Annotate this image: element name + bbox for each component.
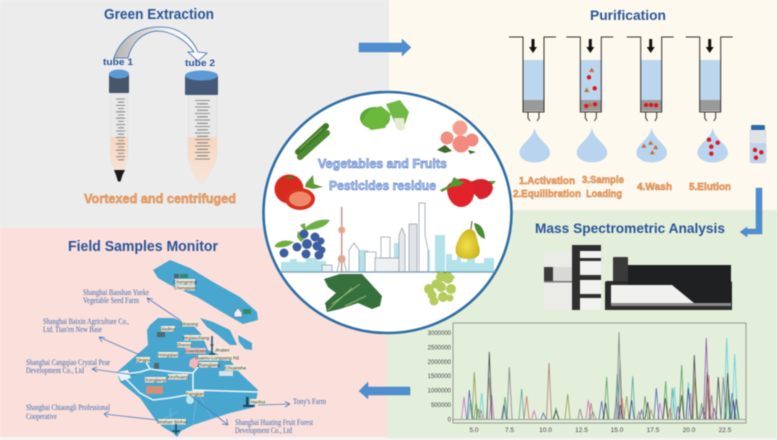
- y axis labels: 1500000: [428, 374, 452, 380]
- icon: pellet: [114, 170, 125, 182]
- farm callout labels: Ltd. Tian'en New Base: [43, 325, 102, 334]
- x axis labels: 7.5: [505, 427, 514, 434]
- map landmark icons: [146, 274, 254, 434]
- icon: LC-MS instrument: [544, 245, 732, 310]
- step labels: 1.Activation: [519, 176, 575, 187]
- step labels: 3.Sample: [582, 175, 624, 186]
- illustration: strawberries: [440, 177, 496, 207]
- central circle: [264, 92, 512, 333]
- illustration: Shanghai skyline: [280, 203, 495, 272]
- panel: green extraction: [0, 0, 389, 228]
- step labels: [513, 175, 731, 200]
- farm callout labels: Shanghai Baoshan Yueke: [83, 288, 149, 297]
- label: tube 1: tube 1: [103, 57, 134, 68]
- y axis labels: 3000000: [428, 331, 452, 337]
- x axis labels: 20.0: [683, 427, 696, 434]
- y axis labels: 0: [448, 418, 452, 424]
- y axis labels: 2000000: [428, 360, 452, 366]
- chromatogram peaks: [462, 332, 739, 419]
- farm callout labels: [26, 288, 327, 435]
- map place names: Zhangjiang: [197, 362, 220, 368]
- circle title: Pesticides residue: [329, 178, 436, 193]
- step labels: 5.Elution: [689, 182, 731, 193]
- illustration: kale: [324, 274, 382, 312]
- panel: mass spectrometric analysis: [387, 210, 777, 438]
- column: activation: [509, 37, 556, 162]
- map place names: Qingpu: [136, 358, 151, 362]
- y axis labels: 500000: [431, 403, 452, 409]
- step labels: Loading: [586, 189, 622, 200]
- map place names: Chengqiao: [174, 286, 197, 290]
- circle title: Vegetables and Fruits: [318, 156, 447, 171]
- map callout arrows: [92, 298, 290, 425]
- column: sample loading: [566, 37, 613, 162]
- map place names: Wusong: [181, 322, 198, 326]
- illustration: blueberries: [275, 220, 330, 260]
- farm callout labels: Shanghai Baixin Agriculture Co.,: [43, 317, 129, 326]
- panel: field samples monitor: [0, 228, 387, 437]
- y axis labels: [428, 331, 452, 424]
- map: Shanghai: [117, 260, 266, 437]
- illustration: peaches: [437, 120, 478, 154]
- x axis labels: 22.5: [719, 427, 732, 434]
- map place names: Zhenru: [177, 342, 192, 348]
- farm callout labels: Shanghai Chiaongli Professional: [26, 403, 111, 412]
- map place names: [136, 280, 265, 424]
- farm callout labels: Shanghai Cangqiao Crystal Pear: [26, 358, 110, 367]
- arrow: extraction to purification: [359, 39, 411, 56]
- arrow: purification to mass spectrometry: [740, 188, 762, 237]
- map place names: Huamu-Longyang Rd: [195, 356, 239, 360]
- map place names: Xinzhuang: [167, 374, 189, 380]
- heading: Purification: Purification: [590, 7, 666, 23]
- map place names: Jinqiao: [215, 348, 230, 352]
- icon: tube 1: [109, 70, 129, 182]
- heading: Mass Spectrometric Analysis: Mass Spectrometric Analysis: [535, 220, 725, 236]
- icon: vial: [750, 125, 766, 163]
- illustration: tomatoes: [274, 174, 323, 210]
- caption: vortexed and centrifuged: Vortexed and centrifuged: [84, 191, 236, 206]
- icon: Oriental Pearl Tower: [337, 207, 346, 272]
- heading: Field Samples Monitor: Field Samples Monitor: [68, 238, 218, 255]
- x axis labels: 10.0: [539, 427, 552, 434]
- illustration: grapes: [424, 272, 456, 306]
- map place names: Nanhui: [251, 400, 265, 404]
- step labels: 2.Equilibration: [513, 189, 581, 200]
- illustration: lettuce: [360, 100, 409, 131]
- chart: chromatogram: [428, 323, 746, 434]
- illustration: pear: [456, 221, 485, 259]
- farm callout labels: Vegetable Seed Farm: [83, 296, 140, 305]
- circle title: [318, 156, 447, 193]
- x axis labels: 17.5: [647, 427, 660, 434]
- map place names: Fengjian: [186, 392, 204, 396]
- icon: tv tower: [209, 336, 215, 356]
- icon: tube 2: [185, 70, 218, 183]
- y axis labels: 2500000: [428, 346, 452, 352]
- x axis labels: 12.5: [575, 427, 588, 434]
- column: wash: [627, 37, 674, 162]
- heading: Green Extraction: Green Extraction: [104, 6, 214, 23]
- illustration: cucumbers: [298, 126, 327, 157]
- farm callout labels: Tony's Farm: [293, 397, 327, 406]
- map place names: Chuansha: [225, 366, 246, 370]
- farm callout labels: Cooperative: [26, 412, 57, 421]
- map place names: Downtown: [185, 348, 207, 354]
- arrow: tube 1 to tube 2: [114, 27, 207, 61]
- map place names: Jiading: [161, 326, 176, 332]
- farm callout labels: Development Co., Ltd: [235, 426, 292, 435]
- farm callout labels: Shanghai Huating Fruit Forest: [235, 418, 314, 427]
- x axis labels: [469, 427, 732, 434]
- column: elution: [686, 37, 733, 162]
- panel: purification: [389, 0, 777, 210]
- map place names: Jinshan Binhai: [157, 420, 187, 424]
- map place names: Hongqiao: [158, 352, 178, 358]
- step labels: 4.Wash: [637, 182, 672, 193]
- x axis labels: 15.0: [611, 427, 624, 434]
- y axis labels: 1000000: [428, 388, 452, 394]
- arrow: mass spectrometry to field samples: [359, 382, 410, 399]
- map place names: Songjiang: [145, 378, 166, 382]
- map place names: Chongming: [173, 280, 197, 284]
- map place names: Wujiaochang: [183, 336, 210, 340]
- label: tube 2: tube 2: [185, 58, 215, 69]
- x axis labels: 5.0: [469, 427, 479, 434]
- farm callout labels: Development Co., Ltd: [26, 366, 84, 375]
